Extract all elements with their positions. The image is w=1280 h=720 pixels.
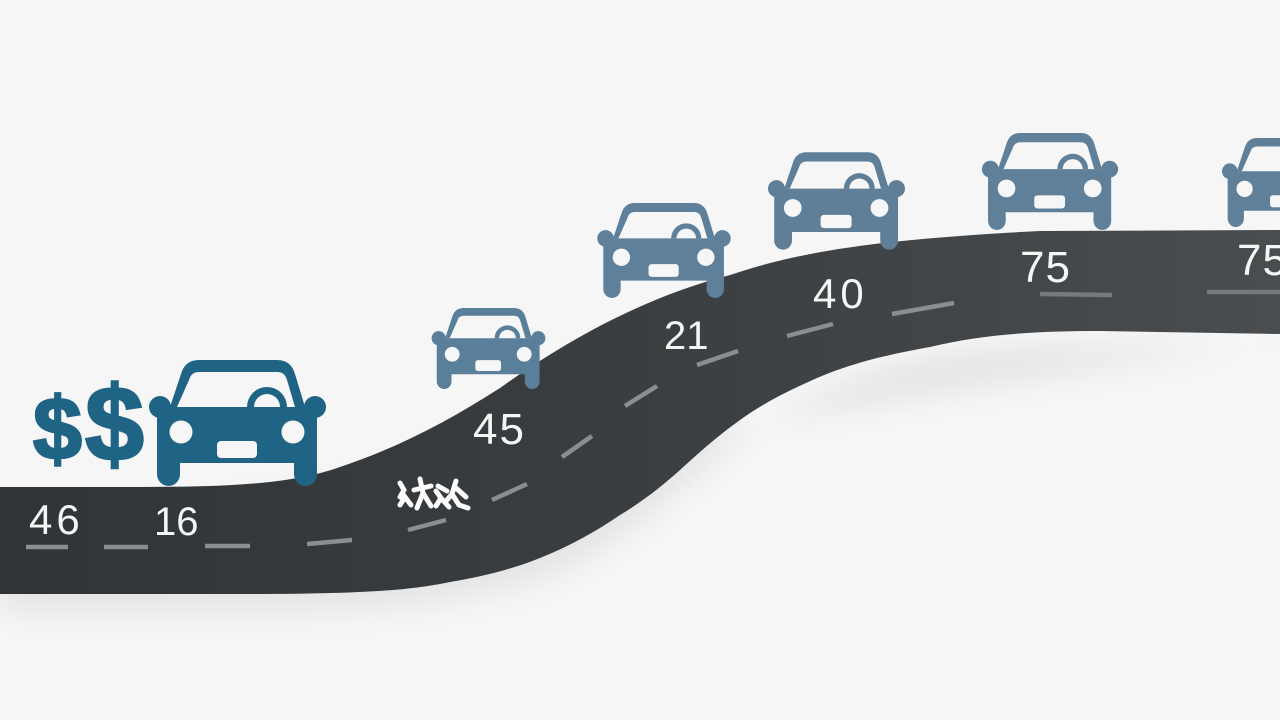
dollar signs: [33, 365, 144, 483]
car icon: fifth: [982, 133, 1118, 230]
road centre dashes: [26, 292, 1280, 547]
dollar signs: $: [33, 379, 82, 478]
car icon: second: [432, 308, 545, 389]
road numbers: 40: [813, 270, 868, 317]
icon: crowd of people: [400, 479, 468, 508]
car icon: third: [597, 203, 731, 298]
road numbers: 16: [154, 500, 198, 544]
road numbers: 46: [29, 496, 84, 543]
dollar signs: $: [85, 365, 144, 483]
road numbers: 75: [1020, 243, 1071, 292]
road numbers: 45: [473, 405, 526, 454]
road numbers: [29, 236, 1280, 544]
car icon: fourth: [768, 152, 905, 250]
car icon: foreground: [149, 360, 326, 486]
road shadow: [0, 340, 1280, 612]
road: [0, 230, 1280, 594]
car icon: sixth, cropped: [1222, 138, 1280, 227]
road numbers: 21: [664, 314, 708, 358]
